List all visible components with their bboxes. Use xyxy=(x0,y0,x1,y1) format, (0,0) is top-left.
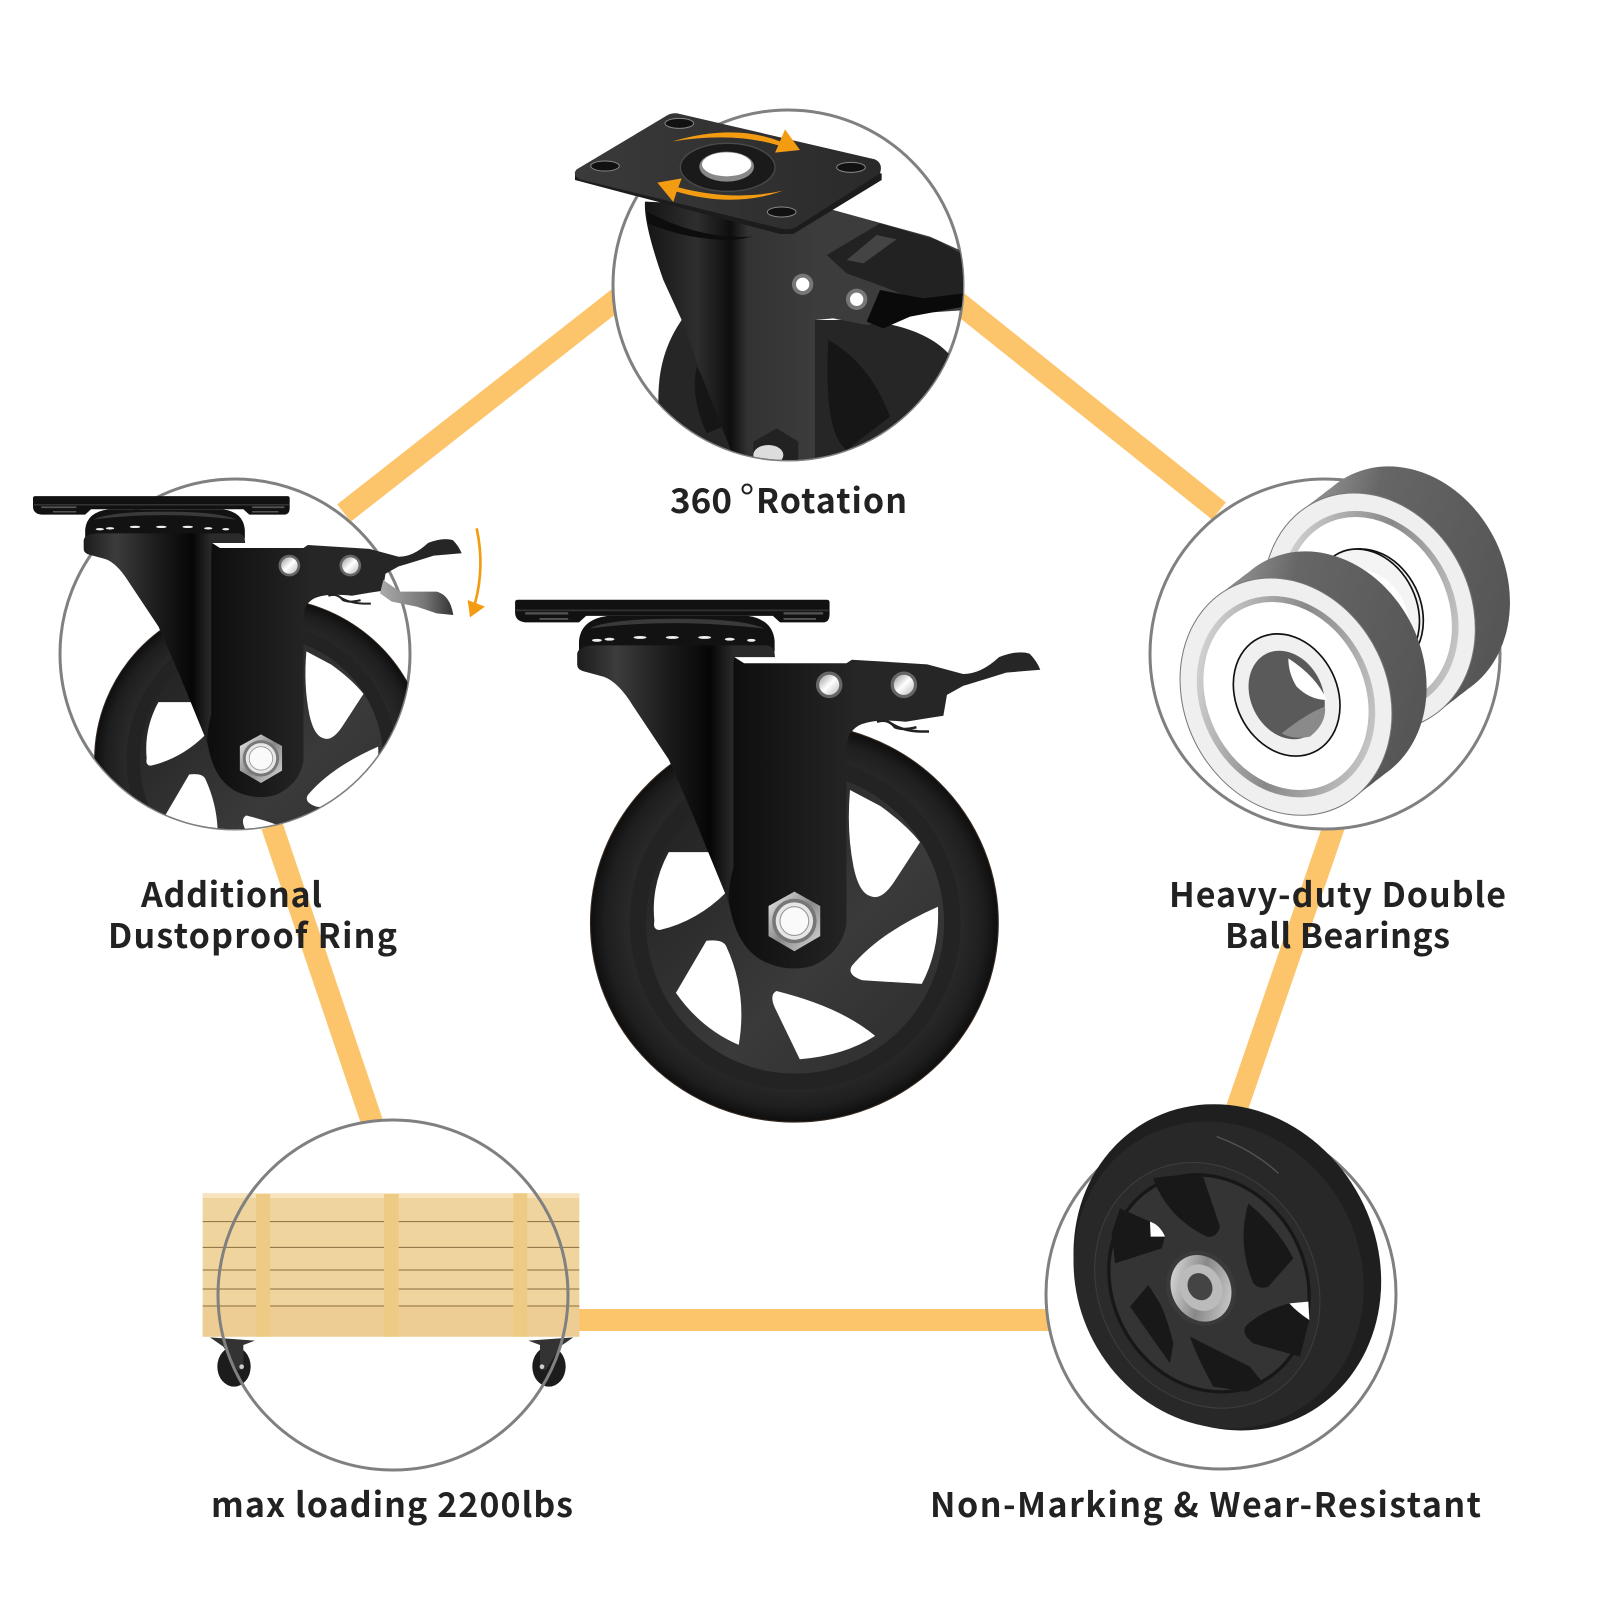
brake lever lowered position xyxy=(380,580,453,615)
label: additional dustproof ring: Dustoproof Ring xyxy=(108,909,397,958)
illustration: rubber wheel xyxy=(1017,1050,1438,1485)
panel: non-marking wheel xyxy=(1017,1050,1438,1485)
illustration: wooden crate on casters xyxy=(203,1193,579,1387)
connector lines: orange pentagon xyxy=(272,281,1334,1320)
label: heavy-duty double ball bearings: Ball Bearings xyxy=(1225,909,1450,958)
icon: lever down arrow xyxy=(468,528,485,617)
label: additional dustproof ring: Additional xyxy=(140,868,322,917)
label: additional dustproof ring xyxy=(108,868,397,958)
label: non-marking and wear-resistant: Non-Marking & Wear-Resistant xyxy=(930,1478,1481,1527)
panel: max loading xyxy=(203,1120,579,1470)
label: heavy-duty double ball bearings xyxy=(1169,868,1506,958)
label: 360 rotation: Rotation xyxy=(756,474,907,523)
icon: rotation arrows xyxy=(657,129,800,202)
mounting plate with rotation arrows xyxy=(575,113,882,234)
caster wheel clipped to circle xyxy=(94,603,408,829)
label: max loading: max loading 2200lbs xyxy=(211,1478,573,1527)
panel: double ball bearings xyxy=(1141,430,1549,851)
caster mount and fork xyxy=(33,496,462,797)
label: 360 rotation xyxy=(670,474,907,523)
circle outline xyxy=(218,1120,568,1470)
caster: main product xyxy=(515,600,1040,1122)
swivel caster close-up, clipped to circle xyxy=(644,202,963,460)
caster wheels under crate xyxy=(210,1337,573,1387)
panel: additional dustproof ring xyxy=(33,478,485,830)
illustration: pair of bearings xyxy=(1141,430,1549,851)
label: 360 rotation: 360 xyxy=(670,474,732,523)
label: heavy-duty double ball bearings: Heavy-duty Double xyxy=(1169,868,1506,917)
panel: 360 rotation xyxy=(574,108,964,462)
